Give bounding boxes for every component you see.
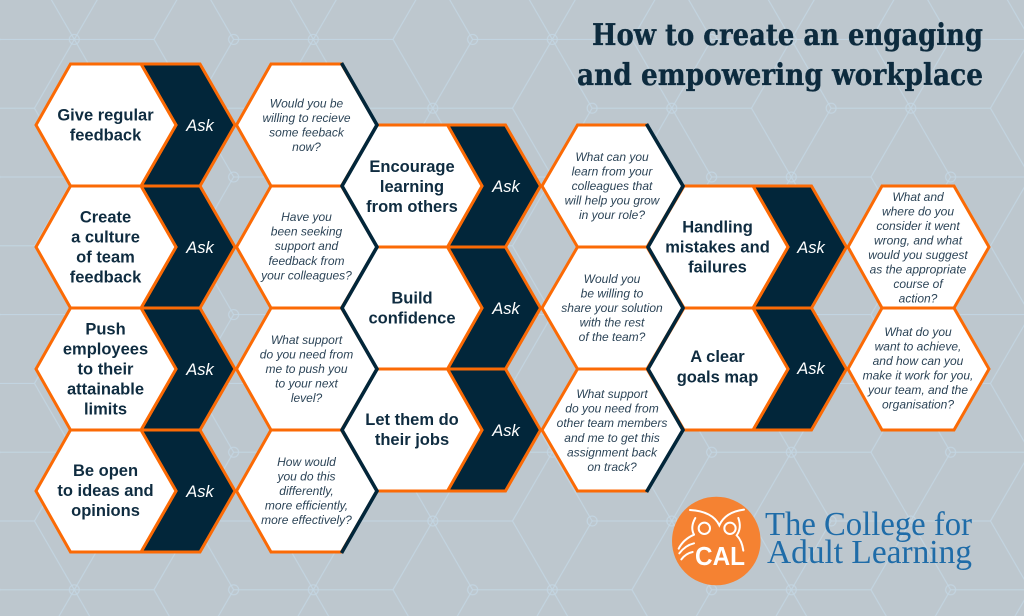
dark zigzag divider between columns 2 and 3 [342,63,377,553]
action: give regular feedback: feedback [70,126,142,144]
question: what do you want to achieve [848,308,989,430]
action: handling mistakes and failures: Ask [796,239,825,257]
question: do this differently: more efficiently, [265,499,348,513]
action: push employees: employees [63,340,148,358]
action: let them do their jobs: Ask [491,422,520,440]
question: what went wrong: wrong, and what [874,234,963,248]
action: handling mistakes and failures: failures [688,258,747,276]
question: willing to receive feedback [236,64,377,186]
question: what do you want to achieve: your team, and the [867,383,968,397]
action: be open to ideas: to ideas and [57,482,154,500]
action: handling mistakes and failures: mistakes and [665,238,770,256]
question: support to next level: level? [291,391,322,405]
question: share your solution: of the team? [579,330,646,344]
question: learn from colleagues: in your role? [579,208,645,222]
question: what went wrong: where do you [882,204,954,218]
action: let them do their jobs [342,369,540,491]
action: a clear goals map: A clear [690,348,745,366]
question: what went wrong: What and [892,190,944,204]
action: create a culture of team feedback: a culture [71,228,140,246]
action: encourage learning: Ask [491,178,520,196]
question: share your solution: share your solution [561,301,663,315]
column 3: action hexagons [342,125,540,491]
question: what went wrong: as the appropriate [870,262,967,276]
action: be open to ideas: Be open [73,462,138,480]
action: be open to ideas: Ask [185,483,214,501]
question: assignment back on track: other team members [557,416,667,430]
action: build confidence: confidence [368,310,456,328]
column 1: action hexagons [36,64,235,552]
question: assignment back on track: assignment back [567,445,658,459]
action: a clear goals map: Ask [796,360,825,378]
action: a clear goals map: goals map [677,368,758,386]
question: willing to receive feedback: willing to recieve [262,111,351,125]
question: seeking support: support and [275,239,339,253]
question: learn from colleagues: learn from your [572,164,653,178]
question: learn from colleagues: What can you [575,150,649,164]
question: what do you want to achieve: make it work for you, [863,368,973,382]
column 6: question hexagons [848,186,989,430]
action: push employees [36,308,235,430]
question: seeking support: your colleagues? [260,268,352,282]
action: handling mistakes and failures: Handling [682,218,753,236]
question: seeking support: been seeking [271,225,343,239]
question: what went wrong: consider it went [876,219,960,233]
question: assignment back on track: What support [576,387,648,401]
action: encourage learning: Encourage [369,158,455,176]
question: what went wrong: action? [899,292,938,306]
question: support to next level: to your next [275,377,339,391]
question: learn from colleagues [542,125,683,247]
action: push employees: limits [84,400,127,418]
action: build confidence: Ask [491,300,520,318]
question: support to next level: do you need from [260,347,353,361]
action: push employees: Push [85,320,126,338]
question: assignment back on track: on track? [587,460,637,474]
action: create a culture of team feedback: of team [76,248,135,266]
dark zigzag divider between columns 4 and 5 [646,124,683,492]
logo: The College for Adult Learning [672,497,973,585]
question: willing to receive feedback: Would you be [270,96,344,110]
question: seeking support [236,186,377,308]
action: push employees: Ask [185,361,214,379]
column 4: question hexagons [542,125,683,491]
logo wordmark: The College for [765,506,973,543]
question: what do you want to achieve: and how can you [873,354,964,368]
action: build confidence: Build [391,290,433,308]
action: create a culture of team feedback: Ask [185,239,214,257]
action: a clear goals map [648,308,846,430]
logo wordmark [765,506,973,571]
question: share your solution: Would you [584,272,641,286]
question: what do you want to achieve: What do you [884,325,952,339]
question: assignment back on track [542,369,683,491]
action: encourage learning: learning [380,178,444,196]
question: what went wrong: course of [893,277,944,291]
question: seeking support: Have you [281,210,332,224]
action: create a culture of team feedback: feedback [70,268,142,286]
action: encourage learning: from others [366,198,458,216]
action: handling mistakes and failures [648,186,846,308]
question: do this differently: you do this [276,469,336,483]
question: learn from colleagues: colleagues that [572,179,653,193]
column 5: action hexagons [648,186,846,430]
action: encourage learning [342,125,540,247]
action: build confidence [342,247,540,369]
question: do this differently: How would [277,455,336,469]
action: let them do their jobs: their jobs [375,431,449,449]
question: support to next level [236,308,377,430]
question: assignment back on track: and me to get this [564,431,660,445]
question: what do you want to achieve: organisation? [882,398,954,412]
question: support to next level: What support [271,333,343,347]
logo wordmark: Adult Learning [767,534,972,571]
question: share your solution [542,247,683,369]
column 2: question hexagons [236,64,377,552]
action: let them do their jobs: Let them do [365,411,459,429]
action: give regular feedback: Give regular [57,106,154,124]
icon: owl badge: CAL [695,541,745,571]
action: be open to ideas [36,430,235,552]
icon: owl badge [672,497,761,585]
question: willing to receive feedback: some feeback [269,126,345,140]
question: do this differently [236,430,377,552]
question: what went wrong: would you suggest [868,248,968,262]
action: push employees: to their [78,360,134,378]
question: share your solution: with the rest [580,316,645,330]
question: share your solution: be willing to [581,286,644,300]
question: learn from colleagues: will help you grow [565,194,661,208]
action: create a culture of team feedback [36,186,235,308]
question: what do you want to achieve: want to achieve, [875,340,961,354]
question: what went wrong [848,186,989,308]
action: give regular feedback [36,64,235,186]
action: be open to ideas: opinions [71,502,140,520]
question: assignment back on track: do you need from [565,402,659,416]
question: do this differently: more effectively? [261,513,352,527]
action: give regular feedback: Ask [185,117,214,135]
question: support to next level: me to push you [265,362,348,376]
question: willing to receive feedback: now? [292,140,321,154]
question: seeking support: feedback from [268,254,345,268]
action: push employees: attainable [67,380,144,398]
action: create a culture of team feedback: Create [80,208,131,226]
title [577,18,983,93]
question: do this differently: differently, [279,484,334,498]
